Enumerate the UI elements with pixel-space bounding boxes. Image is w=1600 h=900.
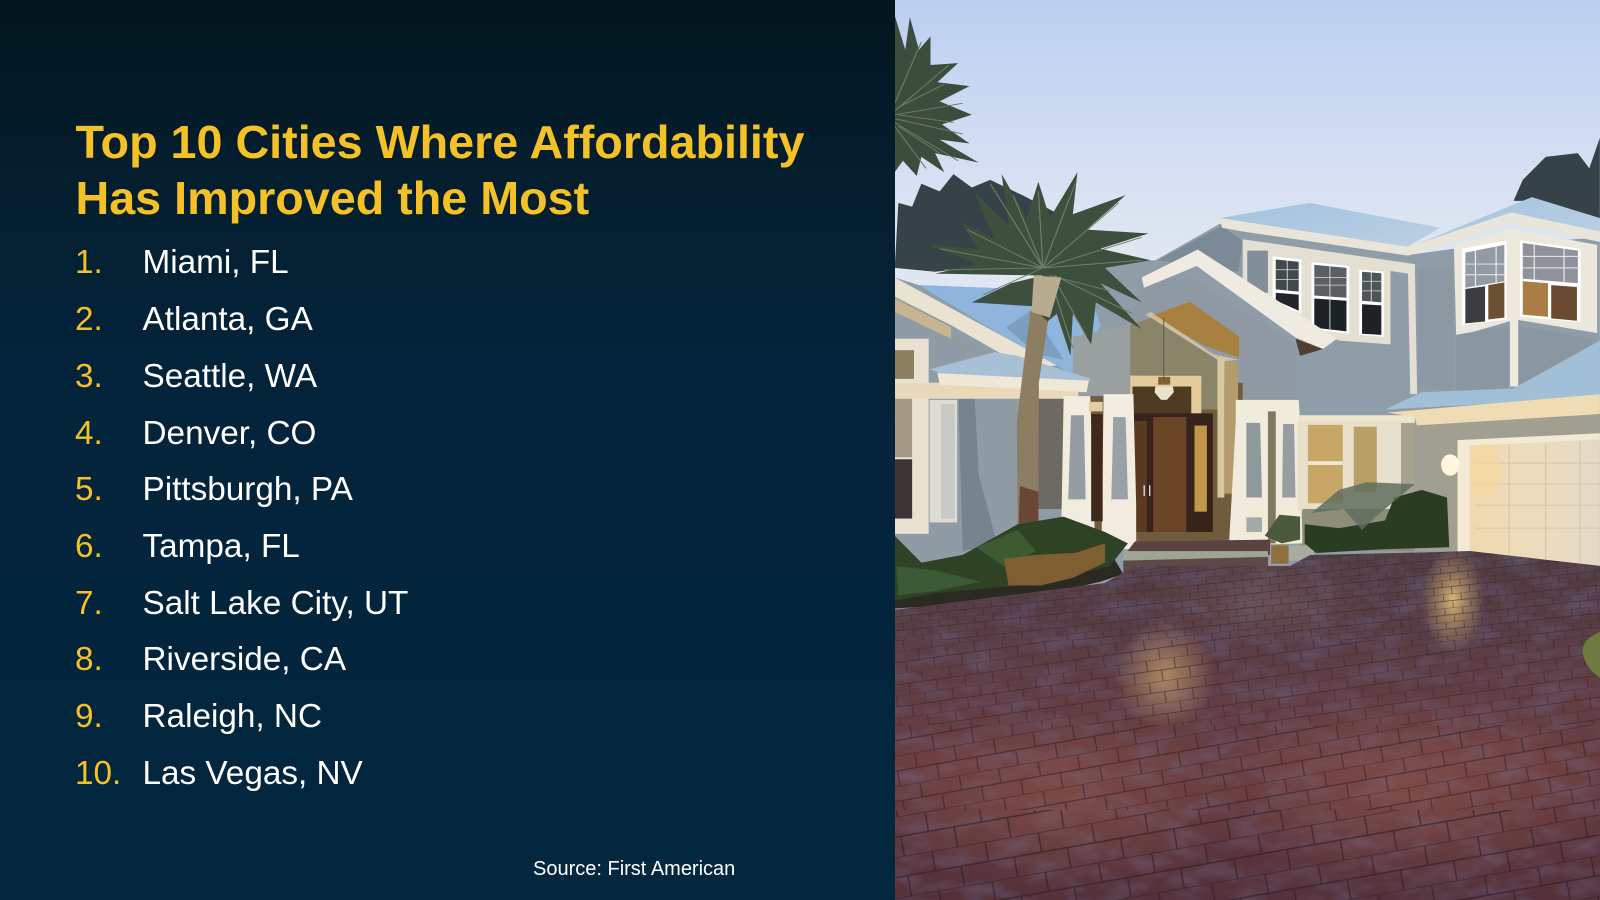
lantern [1155,318,1174,400]
title: Top 10 Cities Where Affordability [76,116,804,168]
mottled pavers [894,545,1600,900]
entry wall [1130,318,1217,409]
sky [894,0,1600,640]
left windows [895,339,929,534]
item 3: Seattle, WA [142,358,318,395]
house backing [895,224,1600,612]
gable fascia [1142,250,1337,349]
item 2: Atlanta, GA [142,301,314,338]
item 1: 1. [75,244,103,281]
panel: photo of house at dusk [870,0,1600,900]
item 3: 3. [75,358,103,395]
palm fronds main tree [928,172,1151,356]
entry soffit [1151,302,1239,358]
item 10: 10. [75,755,121,792]
source note: Source: First American [533,858,735,880]
item 9: 9. [75,698,103,735]
item 8: Riverside, CA [142,641,347,678]
item 9: Raleigh, NC [142,698,322,735]
driveway [870,545,1600,900]
porch small roof [930,352,1091,385]
item 6 [75,528,300,565]
lower right roof [1385,341,1600,409]
door frame and door [1130,376,1213,532]
upper fascia [1220,212,1600,256]
item 7: 7. [75,585,103,622]
palm trunk [1017,276,1061,551]
item 4: Denver, CO [142,415,316,452]
upper window surround [1243,239,1417,394]
item 5: Pittsburgh, PA [142,471,354,508]
garage door [1458,433,1600,566]
bay wall and windows [1454,229,1597,337]
title: Has Improved the Most [76,172,589,224]
item 4: 4. [75,415,103,452]
title [76,116,804,224]
grass island [1583,632,1600,678]
front steps [1123,540,1314,573]
list: top 10 cities [75,244,408,792]
upper roof [1220,203,1440,248]
upper windows [1273,256,1384,337]
right roof [1406,197,1600,249]
left wall [895,314,1073,563]
paver grid [894,545,1600,640]
item 1: Miami, FL [142,244,289,281]
item 2: 2. [75,301,103,338]
upper wall [1151,224,1454,417]
left roof [919,268,1100,377]
house and landscaping [895,15,1600,612]
entry backing [1089,383,1243,543]
left gable fascia [895,277,1057,367]
shrubs [895,482,1449,608]
item 6: 6. [75,528,103,565]
palm fronds upper left [895,15,979,176]
item 1 [75,244,289,281]
garage eave [1387,394,1600,427]
gable wall [1130,277,1295,400]
item 5: 5. [75,471,103,508]
porch columns [1061,394,1302,549]
item 10: Las Vegas, NV [142,755,364,792]
lower windows [1298,415,1415,551]
item 7: Salt Lake City, UT [142,585,408,622]
wall lamp [1441,454,1459,476]
item 6: Tampa, FL [142,528,300,565]
light reflections [1424,552,1482,648]
background trees [895,138,1600,272]
item 8: 8. [75,641,103,678]
panel: left navy background [0,0,895,900]
